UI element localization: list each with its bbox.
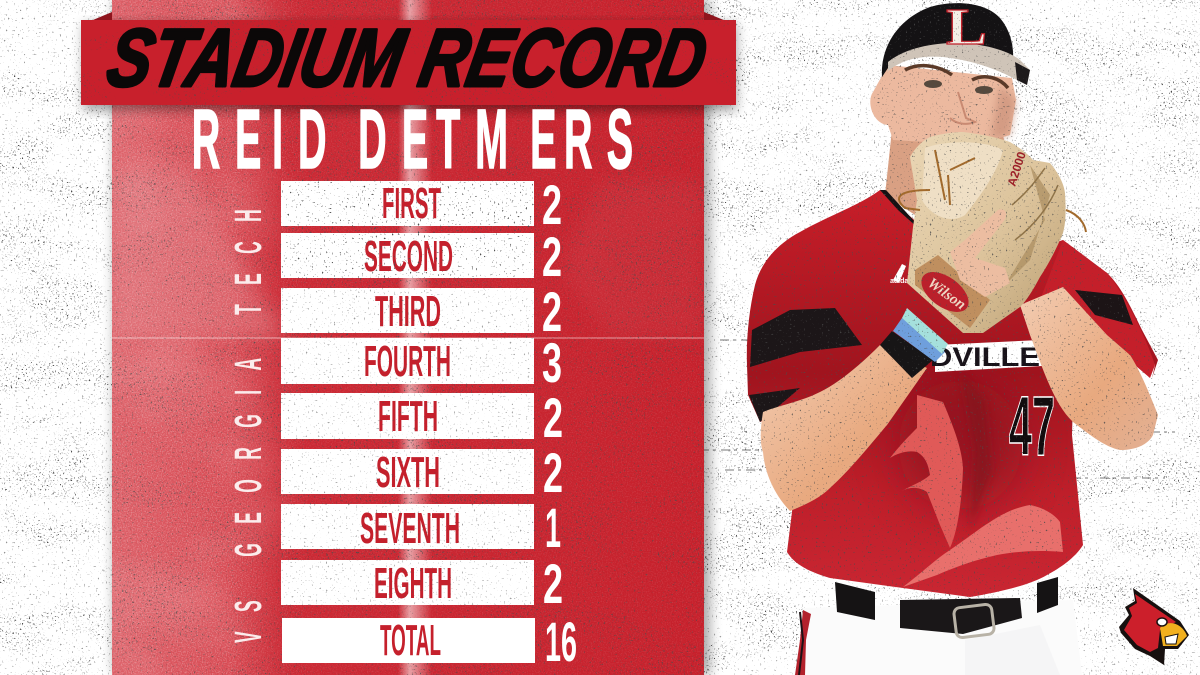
- jersey: [747, 190, 1158, 597]
- row: eighth: 2: [543, 552, 563, 615]
- row: fourth: [281, 331, 562, 394]
- jersey swoosh: [903, 505, 1063, 587]
- row: eighth: EIGHTH: [374, 559, 452, 608]
- heading: stadium record: STADIUM RECORD: [101, 12, 714, 104]
- row: seventh: 1: [545, 496, 561, 559]
- neck: [885, 120, 1010, 225]
- speckle over player: [745, 0, 1165, 600]
- belt: [835, 577, 1058, 638]
- cap: [882, 0, 1030, 85]
- row: fourth: 3: [542, 331, 562, 394]
- row: fourth: FOURTH: [364, 337, 451, 386]
- speckle over rows: [281, 181, 534, 605]
- row: first: [281, 173, 562, 236]
- row: total: [282, 610, 577, 673]
- row: second: SECOND: [364, 232, 453, 281]
- row: third: [281, 280, 562, 343]
- fingers: [950, 209, 1010, 297]
- left forearm: [761, 345, 927, 511]
- wrist bands: [880, 308, 948, 378]
- row: fifth: [281, 386, 563, 449]
- row: first: 2: [542, 173, 562, 236]
- player photo: [745, 0, 1165, 675]
- side label: vs georgia tech: VS GEORGIA TECH: [228, 209, 270, 643]
- logo: cardinal: [1119, 588, 1189, 665]
- player name: REID DETMERS: [192, 92, 633, 186]
- row: total: 16: [545, 610, 577, 673]
- panel: red poster: [112, 0, 710, 675]
- row: fifth: 2: [543, 386, 563, 449]
- adidas mark: adidas: [890, 278, 912, 285]
- row: fifth: FIFTH: [378, 392, 438, 441]
- glove: [899, 132, 1086, 333]
- sleeve black band: [750, 308, 862, 367]
- row: sixth: SIXTH: [376, 448, 440, 497]
- pants: [795, 600, 1082, 675]
- row: eighth: [281, 552, 563, 615]
- banner: [81, 12, 736, 110]
- chest wordmark: DVILLE: [930, 342, 1040, 372]
- row: first: FIRST: [382, 179, 441, 228]
- glove model text: A2000: [1005, 150, 1029, 188]
- row: third: 2: [542, 280, 562, 343]
- row: total: TOTAL: [380, 616, 441, 665]
- cap L logo: L: [946, 0, 987, 56]
- wilson patch: [915, 255, 990, 328]
- wilson logo text: Wilson: [924, 275, 968, 313]
- face: [870, 65, 1016, 145]
- row: second: 2: [542, 225, 562, 288]
- row: sixth: [281, 441, 563, 504]
- jersey swoosh: [890, 395, 963, 548]
- row: third: THIRD: [375, 287, 441, 336]
- row: sixth: 2: [543, 441, 563, 504]
- row: seventh: SEVENTH: [360, 504, 460, 553]
- player photo: 47: [1009, 379, 1055, 473]
- row: second: [281, 225, 562, 288]
- right arm: [1020, 287, 1158, 450]
- row: seventh: [281, 496, 561, 559]
- adidas mark: [890, 264, 912, 285]
